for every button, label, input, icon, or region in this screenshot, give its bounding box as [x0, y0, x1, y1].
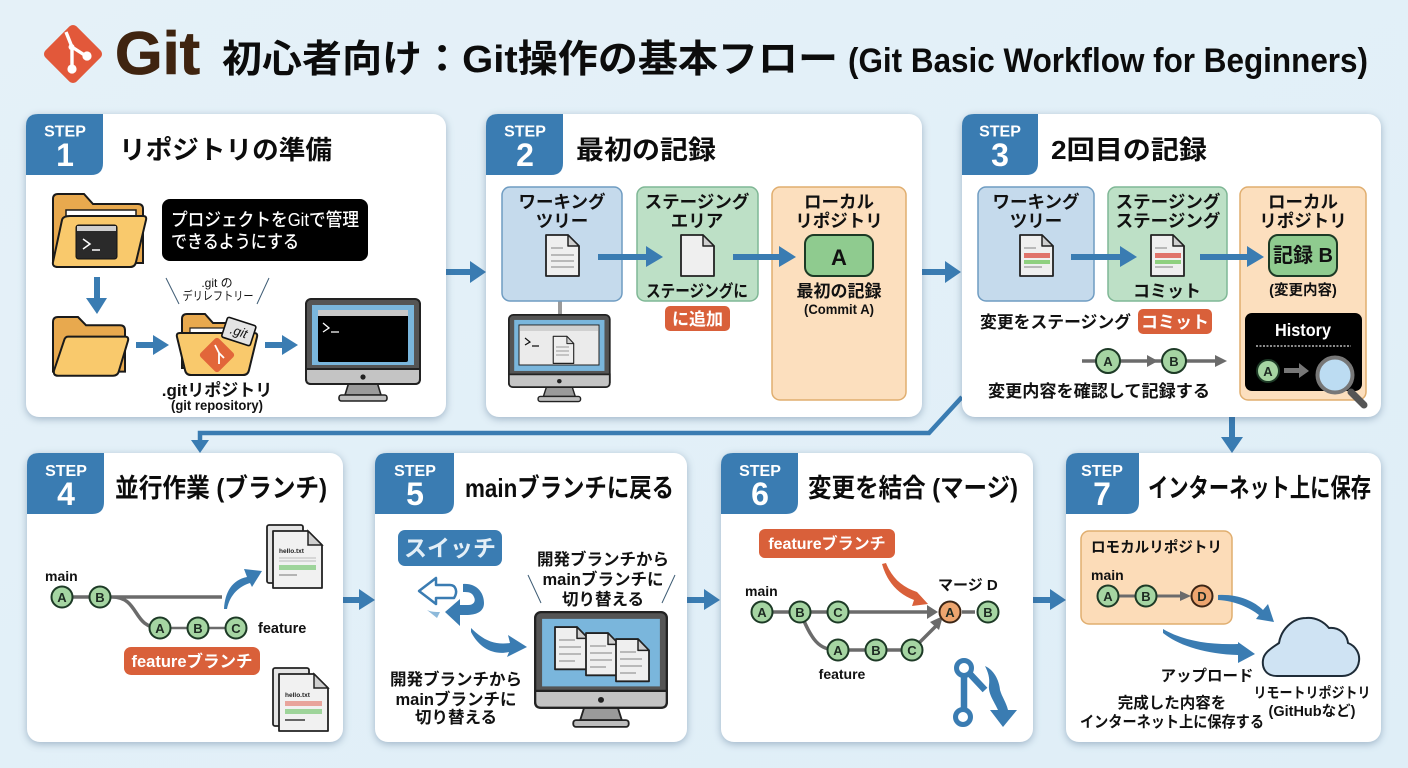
merge diagram: A: [833, 643, 843, 658]
panel: staging: ステージング: [1116, 192, 1221, 212]
tag: commit: [1138, 309, 1212, 334]
panel: local repository: [772, 187, 906, 400]
step badge 1: [26, 114, 103, 175]
branch diagram: [45, 568, 306, 638]
icon: cloud: [1263, 618, 1359, 676]
icon: monitor with documents: [535, 612, 667, 727]
icon: changed document: [1020, 235, 1053, 276]
merge diagram: B: [983, 605, 993, 620]
callout: できるようにする: [171, 232, 299, 252]
annotation: .git directory: デリレフトリー: [182, 288, 254, 303]
arrow: down: [86, 277, 107, 314]
commit chain: A: [1103, 354, 1113, 369]
callout lines: [528, 575, 675, 603]
title: (Git Basic Workflow for Beginners): [848, 42, 1368, 80]
icon: documents upper: [267, 525, 322, 588]
callout: プロジェクトをGitで管理: [171, 210, 359, 230]
panel: local repository: ロモカルリポジトリ: [1091, 539, 1222, 556]
panel: local repository: B: [1141, 589, 1151, 604]
panel: working tree: [978, 187, 1094, 301]
merge diagram: C: [907, 643, 917, 658]
label: git repository: (git repository): [171, 398, 263, 413]
tag: add: に追加: [672, 310, 723, 329]
arrow: [733, 246, 796, 267]
panel: local repository: 最初の記録: [796, 282, 882, 301]
icon: switch arrows: [419, 578, 484, 626]
step badge 2: 2: [516, 137, 534, 173]
text: bottom: 開発ブランチから: [390, 669, 522, 689]
step badge 3: 3: [991, 137, 1009, 173]
text: top: [537, 549, 669, 609]
step badge 7: [1066, 453, 1139, 514]
connector: [558, 301, 562, 315]
step badge 1: 1: [56, 137, 74, 173]
panel: local repository: main: [1091, 567, 1124, 583]
text: remote repository: リモートリポジトリ: [1254, 685, 1370, 702]
panel: local repository: (変更内容): [1269, 282, 1337, 299]
icon: document: [546, 235, 579, 276]
icon: monitor: [509, 315, 610, 402]
merge diagram: feature: [819, 666, 866, 682]
logo: git: [42, 20, 200, 87]
tag: feature branch: [759, 529, 895, 558]
icon: documents lower: hello.txt: [285, 692, 311, 699]
panel: local repository: [1081, 531, 1232, 624]
commit B: 記録 B: [1273, 244, 1333, 267]
tag: add: [665, 306, 730, 331]
panel: local repository: ローカル: [804, 192, 874, 212]
branch diagram: A: [155, 621, 165, 636]
step badge 2: STEP: [504, 124, 546, 140]
arrow: right: [265, 335, 298, 355]
text: stage changes: 変更をステージング: [980, 312, 1131, 332]
merge diagram: C: [833, 605, 843, 620]
step badge 4: [27, 453, 104, 514]
icon: magnifier: [1318, 358, 1364, 405]
merge diagram: [745, 577, 998, 682]
arrow: step 3 to step 7: [1221, 417, 1243, 453]
tag: feature branch: featureブランチ: [768, 534, 886, 553]
step badge 1: STEP: [44, 124, 86, 140]
panel: history: [1245, 313, 1362, 391]
arrow: curved: [471, 628, 527, 657]
text: bottom: 切り替える: [415, 708, 497, 727]
step badge 6: [721, 453, 798, 514]
panel: local repository: リポジトリ: [1259, 211, 1347, 231]
annotation: .git directory: .git の: [201, 276, 233, 290]
text: bottom: mainブランチに: [395, 689, 517, 709]
panel: staging area: ステージング: [645, 192, 750, 212]
icon: documents upper: hello.txt: [279, 548, 305, 555]
arrow: step 1 to step 2: [446, 261, 486, 283]
panel: step 2: [486, 114, 922, 417]
panel: step 6: [721, 453, 1033, 742]
title: 初心者向け：Git操作の基本フロー: [222, 39, 838, 81]
icon: .git folder: [177, 314, 257, 375]
heading: 2回目の記録: [1051, 135, 1207, 165]
arrow: upload: [1163, 629, 1255, 663]
panel: working tree: ワーキング: [993, 192, 1080, 212]
step badge 4: 4: [57, 476, 75, 512]
icon: monitor terminal: [306, 299, 420, 401]
branch diagram: main: [45, 568, 78, 584]
label: コミット: [1133, 282, 1201, 301]
text: description: インターネット上に保存する: [1080, 713, 1264, 731]
panel: step 7: [1066, 453, 1381, 742]
icon: folder with terminal: [53, 194, 146, 267]
arrow: step 3 to step 4: [191, 397, 962, 453]
merge diagram: B: [795, 605, 805, 620]
icon: empty folder: [53, 317, 128, 376]
logo: git: Git: [115, 20, 200, 87]
panel: staging area: [637, 187, 758, 301]
panel: local repository: A: [1103, 589, 1113, 604]
panel: working tree: ツリー: [536, 211, 588, 231]
branch diagram: C: [231, 621, 241, 636]
arrow: [1071, 246, 1137, 267]
arrow: step 6 to step 7: [1033, 589, 1066, 610]
text: top: 切り替える: [562, 590, 644, 609]
panel: step 4: [27, 453, 343, 742]
tag: feature branch: [124, 647, 260, 675]
title: [222, 39, 1368, 81]
commit A: [805, 235, 873, 276]
step badge 6: STEP: [739, 463, 781, 480]
arrow: [1200, 246, 1264, 267]
icon: merge: [956, 660, 1017, 727]
text: remote repository: [1254, 685, 1370, 720]
arrow: right: [136, 335, 169, 355]
arrow: to cloud: [1218, 595, 1274, 622]
branch diagram: feature: [258, 621, 306, 637]
commit chain: [1082, 349, 1227, 373]
step badge 3: STEP: [979, 124, 1021, 140]
commit chain: B: [1169, 354, 1179, 369]
merge diagram: main: [745, 583, 778, 599]
panel: local repository: D: [1197, 589, 1207, 604]
branch diagram: B: [95, 590, 105, 605]
panel: working tree: [502, 187, 622, 301]
branch diagram: B: [193, 621, 203, 636]
icon: document: [681, 235, 714, 276]
callout: [162, 199, 368, 261]
step badge 3: [962, 114, 1038, 175]
arrow: step 5 to step 6: [687, 589, 720, 610]
merge diagram: マージ D: [938, 577, 998, 594]
branch diagram: A: [57, 590, 67, 605]
text: description: 完成した内容を: [1118, 693, 1226, 712]
tag: switch: スイッチ: [404, 535, 496, 561]
panel: staging area: エリア: [671, 211, 723, 231]
text: upload: アップロード: [1160, 667, 1254, 685]
panel: step 3: [962, 114, 1381, 417]
heading: 最初の記録: [576, 135, 716, 165]
panel: staging: ステージング: [1116, 211, 1221, 231]
step badge 5: 5: [406, 476, 424, 512]
arrow: step 2 to step 3: [922, 261, 961, 283]
panel: local repository: リポジトリ: [795, 211, 883, 231]
panel: step 5: [375, 453, 687, 742]
text: description: [1080, 693, 1264, 731]
panel: local repository: [1240, 187, 1366, 405]
tag: commit: コミット: [1141, 313, 1209, 332]
step badge 2: [486, 114, 563, 175]
tag: feature branch: featureブランチ: [131, 651, 253, 671]
arrow: orange curve: [882, 563, 928, 606]
step badge 6: 6: [751, 476, 769, 512]
label: git repository: .gitリポジトリ: [162, 380, 272, 400]
heading: mainブランチに戻る: [465, 473, 674, 503]
icon: changed document: [1151, 235, 1184, 276]
merge diagram: A: [757, 605, 767, 620]
panel: step 1: [26, 114, 446, 417]
text: review: 変更内容を確認して記録する: [988, 381, 1210, 401]
label: ステージングに: [646, 281, 748, 301]
panel: history: A: [1263, 364, 1273, 379]
arrow: curved: [224, 569, 262, 609]
text: top: mainブランチに: [542, 569, 664, 589]
step badge 7: STEP: [1081, 463, 1123, 480]
arrow: [598, 246, 663, 267]
commit A: A: [831, 245, 847, 270]
panel: local repository: ローカル: [1268, 192, 1338, 212]
commit B: [1269, 235, 1337, 276]
step badge 4: STEP: [45, 463, 87, 480]
text: bottom: [390, 669, 522, 727]
merge diagram: A: [945, 605, 955, 620]
annotation: .git directory: [166, 276, 269, 304]
heading: 並行作業 (ブランチ): [115, 473, 327, 503]
text: remote repository: (GitHubなど): [1269, 703, 1356, 720]
panel: working tree: ツリー: [1010, 211, 1062, 231]
step badge 5: [375, 453, 454, 514]
heading: 変更を結合 (マージ): [808, 473, 1018, 503]
merge diagram: B: [871, 643, 881, 658]
panel: history: History: [1275, 320, 1331, 340]
tag: switch: [398, 530, 502, 566]
icon: documents lower: [273, 668, 328, 731]
panel: working tree: ワーキング: [519, 192, 606, 212]
text: top: 開発ブランチから: [537, 549, 669, 569]
step badge 5: STEP: [394, 463, 436, 480]
arrow: step 4 to step 5: [343, 589, 375, 610]
panel: local repository: (Commit A): [804, 301, 874, 317]
panel: staging: [1108, 187, 1227, 301]
icon: .git folder: .git: [228, 322, 251, 342]
label: git repository: [162, 380, 272, 413]
heading: リポジトリの準備: [119, 135, 332, 165]
step badge 7: 7: [1093, 476, 1111, 512]
